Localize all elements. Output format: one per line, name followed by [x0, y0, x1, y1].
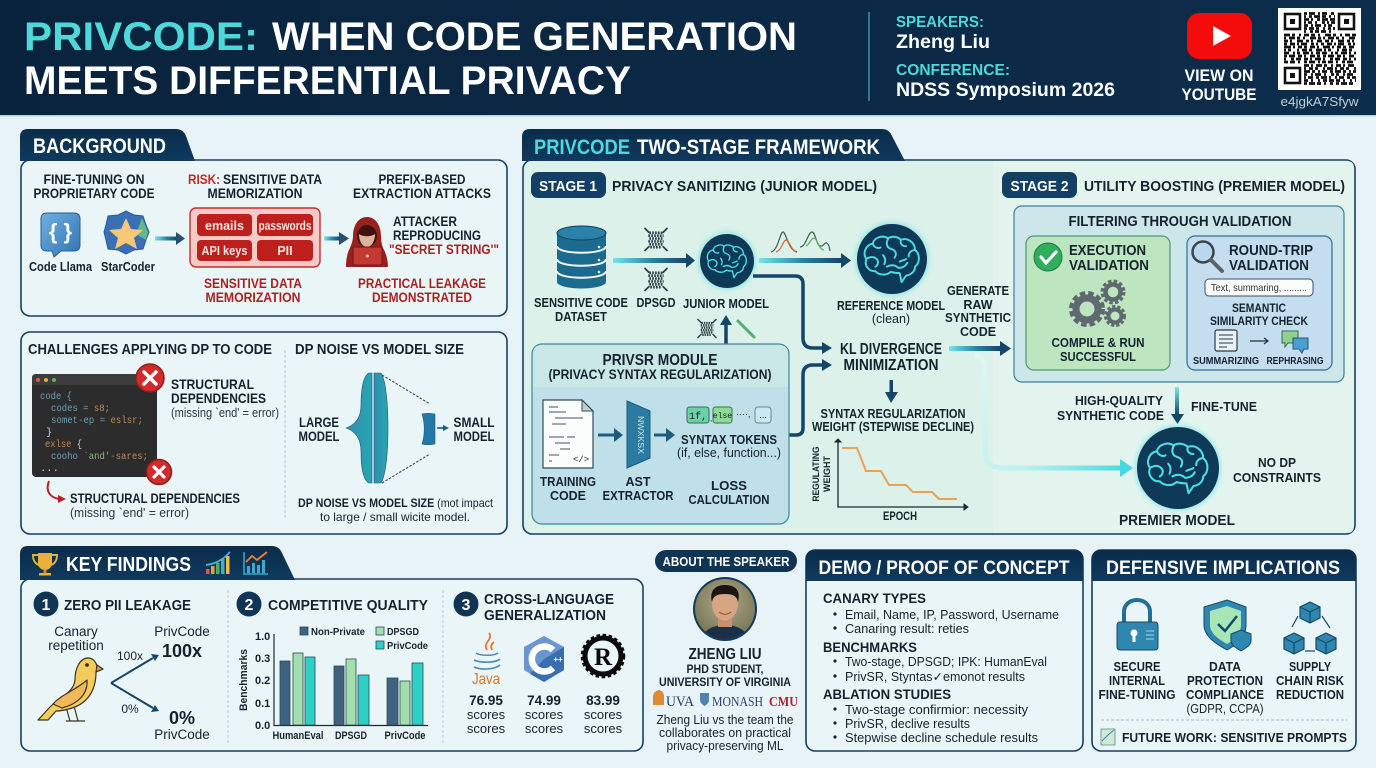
- speaker name and role: PHD STUDENT,: [686, 662, 764, 676]
- syntax tokens: else: [713, 412, 732, 421]
- syntax tokens: SYNTAX TOKENS: [681, 432, 777, 447]
- bar chart: 0.2: [255, 675, 270, 687]
- arrow: junior to kl divergence: [753, 276, 832, 354]
- heading tab: TWO-STAGE FRAMEWORK: [637, 136, 880, 159]
- bar chart: PrivCode: [384, 730, 426, 742]
- structural dependencies note right: [171, 376, 279, 420]
- sensitive data box: emails: [205, 219, 244, 233]
- icon: hooded attacker: [346, 217, 388, 267]
- attacker column: ATTACKER: [393, 214, 457, 229]
- icon: magnifier: [1192, 242, 1222, 271]
- arrow: privsr to kl divergence: [789, 359, 832, 435]
- panel: privsr module: TRAINING: [540, 475, 596, 489]
- stage 2 heading: STAGE 2: [1010, 178, 1068, 195]
- diagram: large model to small model: MODEL: [298, 428, 340, 444]
- ablation studies list: [823, 686, 1038, 745]
- finding 3: cross-language generalization: GENERALIZATION: [484, 608, 606, 624]
- language scores: 83.99: [586, 693, 620, 708]
- heading: DEMO / PROOF OF CONCEPT: [818, 558, 1070, 579]
- arrow: cyan curve to premier model: [975, 356, 1133, 477]
- icon: YouTube button: YOUTUBE: [1182, 85, 1256, 104]
- risk column: RISK:: [188, 172, 220, 187]
- distribution curves: [771, 232, 830, 252]
- ast extractor: EXTRACTOR: [602, 489, 674, 503]
- panel: background: [20, 129, 507, 316]
- syntax tokens: ····,: [736, 409, 750, 419]
- icon: java: Java: [472, 671, 500, 688]
- syntax tokens: (if, else, function...): [677, 445, 781, 460]
- finding 1: zero pii leakage: 100x: [117, 649, 143, 663]
- kl divergence: KL DIVERGENCE: [840, 341, 942, 358]
- code window: [32, 374, 157, 477]
- syntax weight heading: SYNTAX REGULARIZATION: [820, 407, 966, 421]
- risk column: MEMORIZATION: [206, 290, 300, 305]
- arrow: [654, 428, 675, 442]
- title: WHEN CODE GENERATION: [272, 15, 797, 59]
- icon: junior model brain: JUNIOR MODEL: [683, 297, 769, 311]
- line chart: stepwise decline: EPOCH: [883, 511, 917, 523]
- icon: padlock: [1117, 600, 1158, 650]
- no dp constraints: NO DP: [1258, 455, 1296, 470]
- finding 2: competitive quality: [236, 592, 428, 742]
- icon: trophy: [33, 553, 57, 576]
- generate raw synthetic code: RAW: [963, 298, 993, 312]
- canary types list: [823, 590, 1059, 636]
- bar chart: 0.1: [255, 698, 270, 710]
- panel: round-trip validation: VALIDATION: [1229, 257, 1309, 274]
- icon: premier model brain: [1119, 425, 1235, 529]
- finding 3: cross-language generalization: [454, 592, 624, 736]
- heading: dp noise: DP NOISE VS MODEL SIZE: [295, 342, 464, 358]
- bar chart: 0.3: [255, 653, 270, 665]
- code window: }: [46, 427, 52, 439]
- sensitive data box: passwords: [258, 219, 312, 233]
- icon: database: [534, 226, 628, 324]
- panel: round-trip validation: SUMMARIZING: [1193, 355, 1259, 367]
- conference info: NDSS Symposium 2026: [896, 80, 1115, 101]
- icon: rust: R: [594, 644, 613, 671]
- implication labels: CHAIN RISK: [1276, 674, 1344, 688]
- implication labels: INTERNAL: [1109, 674, 1165, 688]
- title: PRIVCODE:: [24, 15, 258, 59]
- panel: execution validation: EXECUTION: [1069, 242, 1146, 259]
- panel: about the speaker: [653, 550, 798, 753]
- heading tab: KEY FINDINGS: [66, 554, 191, 576]
- heading tab: PRIVCODE: [534, 136, 630, 159]
- high quality synthetic code label: [1057, 394, 1164, 423]
- ablation studies list: PrivSR, declive results: [845, 717, 970, 731]
- heading tab: [522, 129, 905, 161]
- panel: privsr module: PRIVSR MODULE: [602, 352, 718, 369]
- diagram: large model to small model: [298, 373, 495, 483]
- language scores: 76.95: [469, 693, 503, 708]
- finding 1: zero pii leakage: repetition: [48, 638, 104, 653]
- structural dependencies note bottom: [70, 491, 240, 520]
- heading: [806, 550, 1083, 581]
- benchmarks list: Two-stage, DPSGD; IPK: HumanEval: [845, 655, 1047, 669]
- ast extractor: NWXKSX: [636, 416, 645, 455]
- speaker bio: Zheng Liu vs the team the: [656, 713, 794, 727]
- speaker name and role: UNIVERSITY OF VIRGINIA: [659, 675, 791, 689]
- arrow: [155, 232, 185, 245]
- heading: DEFENSIVE IMPLICATIONS: [1106, 558, 1340, 579]
- ablation studies list: Two-stage confirmior: necessity: [845, 703, 1029, 717]
- finding 1: zero pii leakage: PrivCode: [154, 624, 210, 639]
- panel: execution validation: SUCCESSFUL: [1060, 350, 1136, 364]
- finding 1: zero pii leakage: PrivCode: [154, 727, 210, 742]
- dpsgd step: [613, 228, 695, 310]
- code window: code {: [40, 391, 72, 403]
- fine-tuning column: PROPRIETARY CODE: [34, 186, 154, 201]
- panel: challenges: [21, 332, 507, 534]
- structural dependencies note right: DEPENDENCIES: [171, 390, 266, 406]
- icon: gears: [1071, 281, 1124, 326]
- speaker bio: [656, 713, 794, 753]
- structural dependencies note bottom: STRUCTURAL DEPENDENCIES: [70, 491, 240, 506]
- arrow: kl to filtering: [949, 341, 1011, 356]
- panel: round-trip validation: Text, summaring, .........: [1211, 282, 1307, 294]
- implication labels: PROTECTION: [1187, 674, 1263, 688]
- finding 2: competitive quality: 2: [245, 597, 254, 614]
- speaker bio: privacy-preserving ML: [666, 739, 784, 753]
- diagram: large model to small model: MODEL: [454, 428, 495, 444]
- icon: training code document: </>: [573, 455, 589, 465]
- generate raw synthetic code: [945, 284, 1011, 339]
- icon: java: [472, 633, 500, 688]
- icon: reference model brain: [837, 222, 945, 326]
- panel: privsr module: [532, 344, 789, 524]
- benchmarks list: [823, 639, 1047, 684]
- panel: privsr module: (PRIVACY SYNTAX REGULARIZATION): [548, 367, 772, 382]
- bar chart: Benchmarks: [238, 649, 250, 711]
- sensitive data box: API keys: [202, 244, 248, 258]
- sensitive data box: [190, 208, 320, 267]
- icon: c++: ++: [553, 655, 563, 664]
- implication labels: COMPLIANCE: [1186, 688, 1264, 702]
- stage 2 heading: UTILITY BOOSTING (PREMIER MODEL): [1084, 179, 1345, 195]
- risk column: SENSITIVE DATA: [204, 276, 302, 291]
- implication labels: SUPPLY: [1289, 660, 1332, 674]
- language scores: [467, 693, 623, 736]
- arrow: [324, 232, 349, 245]
- panel: execution validation: VALIDATION: [1069, 257, 1149, 274]
- icon: database: SENSITIVE CODE: [534, 296, 628, 310]
- icon: reference model brain: (clean): [872, 312, 910, 326]
- bar chart: Non-Private: [311, 626, 365, 638]
- risk column: MEMORIZATION: [208, 186, 302, 201]
- panel: round-trip validation: SEMANTIC: [1232, 303, 1286, 315]
- stage 1 heading: PRIVACY SANITIZING (JUNIOR MODEL): [612, 179, 877, 195]
- attacker column: PREFIX-BASED: [378, 172, 466, 187]
- implication labels: REDUCTION: [1276, 688, 1344, 702]
- code window: codes = s8;: [51, 403, 110, 415]
- code window: ...: [40, 463, 59, 475]
- title: MEETS DIFFERENTIAL PRIVACY: [24, 59, 631, 103]
- fine-tuning column: FINE-TUNING ON: [44, 172, 144, 187]
- arrow: junior to reference: [759, 253, 851, 268]
- syntax tokens: 1f,: [689, 411, 707, 423]
- icon: error cross top: [136, 364, 164, 392]
- bar chart: [238, 626, 428, 742]
- header banner: [0, 0, 1376, 116]
- sensitive data box: PII: [277, 244, 293, 258]
- affiliation logos: [653, 690, 798, 710]
- icon: chart frame: [244, 552, 268, 574]
- line chart: stepwise decline: REGULATING: [811, 446, 822, 502]
- finding 1: zero pii leakage: 0%: [169, 708, 195, 728]
- caption: dp noise: [298, 496, 494, 524]
- canary types list: Canaring result: reties: [845, 622, 969, 636]
- speaker bio: collaborates on practical: [659, 726, 791, 740]
- dpsgd step: DPSGD: [636, 296, 676, 310]
- arrow: privsr to junior: [698, 315, 754, 345]
- bar chart: DPSGD: [387, 626, 419, 638]
- syntax weight heading: [812, 407, 974, 434]
- syntax tokens: ,: [710, 414, 712, 423]
- diagram: large model to small model: SMALL: [454, 414, 495, 430]
- attacker column: PRACTICAL LEAKAGE: [358, 276, 486, 291]
- affiliation logos: CMU: [769, 695, 798, 710]
- finding 1: zero pii leakage: [34, 592, 210, 742]
- bar chart: 0.0: [255, 720, 270, 732]
- high quality synthetic code label: SYNTHETIC CODE: [1057, 409, 1164, 423]
- line chart: stepwise decline: [811, 439, 968, 523]
- QR code: [1278, 8, 1361, 109]
- arrow: kl to weight: [885, 380, 898, 403]
- panel: round-trip validation: ROUND-TRIP: [1229, 242, 1313, 259]
- implication labels: (GDPR, CCPA): [1186, 702, 1264, 716]
- benchmarks list: BENCHMARKS: [823, 639, 917, 655]
- icon: supply chain cubes: [1284, 602, 1336, 654]
- conference info: CONFERENCE:: [896, 62, 1010, 79]
- arrows: canary outcomes: [111, 658, 153, 708]
- structural dependencies note right: (missing `end' = error): [171, 406, 279, 420]
- finding 1: zero pii leakage: 100x: [162, 641, 202, 661]
- finding 3: cross-language generalization: CROSS-LANGUAGE: [484, 592, 614, 608]
- panel: privsr module: CODE: [550, 489, 586, 503]
- attacker column: [346, 172, 499, 305]
- panel: execution validation: COMPILE & RUN: [1052, 336, 1144, 350]
- line chart: stepwise decline: WEIGHT: [822, 456, 833, 492]
- risk column: SENSITIVE DATA: [223, 172, 322, 187]
- high quality synthetic code label: HIGH-QUALITY: [1075, 394, 1164, 408]
- implication labels: [1098, 660, 1344, 716]
- affiliation logos: MONASH: [712, 694, 763, 709]
- language scores: scores: [525, 707, 564, 722]
- icon: error cross bottom: [146, 460, 172, 484]
- speaker name and role: [659, 646, 791, 689]
- panel: round-trip validation: [1187, 236, 1332, 370]
- ast extractor: [602, 401, 674, 503]
- icon: growth bars: [206, 552, 230, 574]
- attacker column: EXTRACTION ATTACKS: [353, 186, 491, 201]
- stage 1 heading: STAGE 1: [539, 178, 597, 195]
- panel: filtering through validation: [1014, 206, 1344, 382]
- icon: check: [1034, 243, 1062, 271]
- panel: round-trip validation: REPHRASING: [1266, 355, 1324, 367]
- icon: c++: [524, 636, 564, 682]
- icon: chat bubbles: [1282, 331, 1308, 353]
- panel: round-trip validation: SIMILARITY CHECK: [1210, 316, 1309, 328]
- icon: Code Llama: [29, 213, 93, 274]
- icon: canary bird: [38, 658, 103, 721]
- icon: shield: [1204, 600, 1251, 651]
- icon: database: DATASET: [555, 310, 607, 324]
- caption: dp noise: to large / small wicite model.: [320, 510, 470, 524]
- stage 2 heading: [1002, 172, 1345, 198]
- implication labels: FINE-TUNING: [1098, 688, 1176, 702]
- attacker column: "SECRET STRING'": [389, 242, 499, 257]
- kl divergence: MINIMIZATION: [844, 357, 938, 374]
- heading tab: BACKGROUND: [33, 135, 166, 158]
- arrow: [598, 428, 623, 442]
- icon: premier model brain: PREMIER MODEL: [1119, 512, 1235, 529]
- finding 2: competitive quality: COMPETITIVE QUALITY: [268, 598, 428, 614]
- kl divergence: [840, 341, 942, 374]
- syntax weight heading: WEIGHT (STEPWISE DECLINE): [812, 420, 974, 434]
- bar chart: DPSGD: [335, 730, 367, 742]
- syntax tokens: LOSS: [711, 479, 747, 493]
- attacker column: REPRODUCING: [393, 228, 481, 243]
- icon: Code Llama: Code Llama: [29, 259, 93, 274]
- language scores: scores: [584, 707, 623, 722]
- arrow: red curved: [48, 481, 66, 503]
- code window: somet-ep = eslsr;: [51, 415, 143, 427]
- affiliation logos: UVA: [666, 694, 694, 710]
- structural dependencies note bottom: (missing `end' = error): [70, 506, 189, 520]
- icon: Code Llama: { }: [49, 219, 73, 244]
- heading: challenges: CHALLENGES APPLYING DP TO CODE: [28, 342, 272, 358]
- fine-tune label: FINE-TUNE: [1191, 400, 1257, 414]
- syntax tokens: ...: [759, 410, 767, 420]
- ablation studies list: ABLATION STUDIES: [823, 686, 951, 702]
- canary types list: CANARY TYPES: [823, 590, 926, 606]
- icon: rust: [582, 636, 624, 676]
- QR code: e4jgkA7Sfyw: [1280, 94, 1359, 109]
- heading tab: [20, 129, 195, 161]
- ablation studies list: Stepwise decline schedule results: [845, 731, 1038, 745]
- heading pill: ABOUT THE SPEAKER: [662, 554, 790, 569]
- icon: YouTube button: VIEW ON: [1184, 66, 1254, 85]
- no dp constraints: CONSTRAINTS: [1233, 470, 1321, 485]
- language scores: scores: [525, 721, 564, 736]
- implication labels: DATA: [1209, 660, 1241, 674]
- arrow: filtering to premier: [1171, 387, 1184, 424]
- fine-tuning column: [29, 172, 155, 274]
- bar chart: HumanEval: [272, 730, 324, 742]
- future work: FUTURE WORK: SENSITIVE PROMPTS: [1122, 730, 1347, 745]
- caption: dp noise: DP NOISE VS MODEL SIZE (mot impact: [298, 496, 494, 510]
- panel: defensive implications: [1092, 550, 1356, 751]
- panel: execution validation: [1026, 236, 1170, 370]
- language scores: scores: [467, 721, 506, 736]
- finding 1: zero pii leakage: 0%: [121, 702, 139, 716]
- generate raw synthetic code: SYNTHETIC: [945, 311, 1011, 325]
- speaker info: Zheng Liu: [896, 32, 990, 53]
- title: [24, 15, 797, 103]
- panel: key findings: [20, 546, 643, 751]
- finding 1: zero pii leakage: ZERO PII LEAKAGE: [64, 598, 191, 614]
- panel: filtering through validation: FILTERING THROUGH VALIDATION: [1068, 214, 1292, 230]
- language scores: 74.99: [527, 693, 561, 708]
- speaker photo: [693, 577, 757, 641]
- panel: framework: [522, 129, 1355, 534]
- finding 3: cross-language generalization: 3: [462, 597, 471, 614]
- code window: exlse {: [45, 439, 82, 451]
- panel: demo / proof of concept: [806, 550, 1083, 751]
- implication labels: SECURE: [1114, 660, 1160, 674]
- icon: training code document: [543, 400, 593, 468]
- canary types list: Email, Name, IP, Password, Username: [845, 608, 1059, 622]
- language scores: scores: [584, 721, 623, 736]
- icon: junior model brain: [683, 232, 769, 311]
- attacker column: DEMONSTRATED: [372, 290, 472, 305]
- speaker info: SPEAKERS:: [896, 14, 984, 31]
- generate raw synthetic code: CODE: [960, 325, 996, 339]
- language scores: scores: [467, 707, 506, 722]
- icon: StarCoder: StarCoder: [101, 259, 155, 274]
- heading: [1092, 550, 1356, 581]
- ast extractor: AST: [626, 475, 651, 489]
- structural dependencies note right: STRUCTURAL: [171, 376, 254, 392]
- syntax tokens: [677, 407, 781, 507]
- generate raw synthetic code: GENERATE: [947, 284, 1009, 298]
- icon: YouTube button: [1182, 13, 1256, 104]
- diagram: large model to small model: LARGE: [299, 414, 339, 430]
- code window: cooho `and'-sares;: [51, 450, 148, 463]
- heading pill: [655, 550, 797, 572]
- icon: reference model brain: REFERENCE MODEL: [837, 299, 945, 313]
- icon: document: [1215, 330, 1237, 351]
- benchmarks list: PrivSR, Styntas✓emonot results: [845, 670, 1025, 684]
- speaker info: [896, 14, 990, 53]
- bar chart: PrivCode: [387, 640, 428, 652]
- finding 1: zero pii leakage: Canary: [54, 624, 98, 639]
- conference info: [896, 62, 1115, 101]
- heading tab: [20, 546, 295, 580]
- syntax tokens: CALCULATION: [688, 493, 770, 507]
- no dp constraints: [1233, 455, 1321, 485]
- bar chart: 1.0: [255, 631, 270, 643]
- risk column: [188, 172, 322, 305]
- stage 1 heading: [531, 172, 877, 198]
- speaker name and role: ZHENG LIU: [688, 646, 762, 663]
- finding 1: zero pii leakage: 1: [42, 597, 51, 614]
